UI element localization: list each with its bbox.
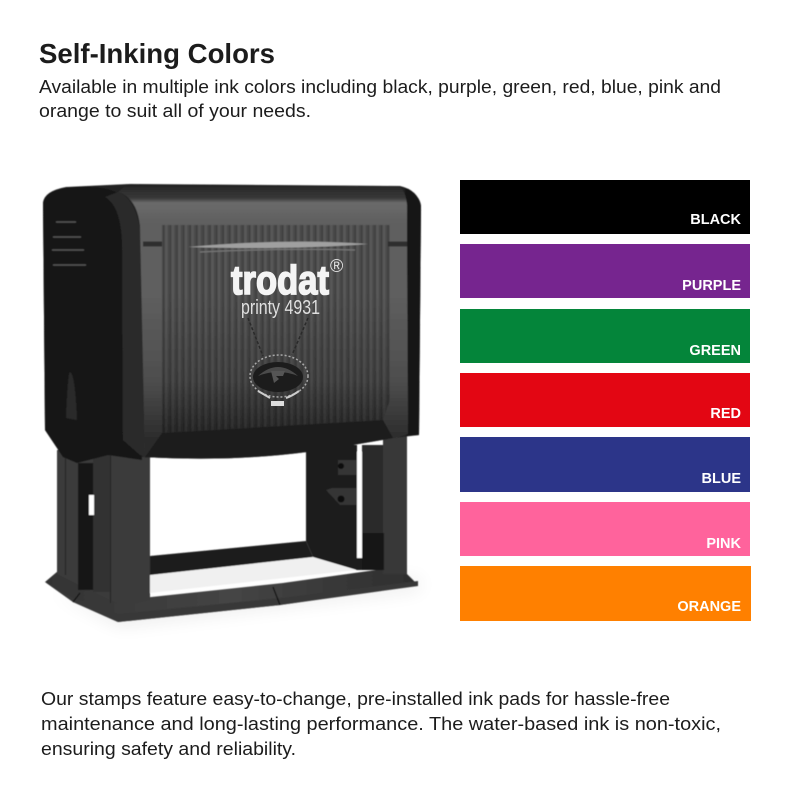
pointer lines to button xyxy=(248,318,308,356)
trodat logo: trodat xyxy=(231,257,329,303)
trodat logo: printy 4931 xyxy=(241,297,320,319)
trodat logo: ® xyxy=(330,256,343,276)
footer description text: Our stamps feature easy-to-change, pre-installed ink pads for hassle-free xyxy=(41,688,670,709)
swatch: red xyxy=(460,373,750,427)
left pillar xyxy=(57,450,150,606)
product photo: self-inking stamp xyxy=(43,184,421,626)
ribbed front panel xyxy=(162,225,390,433)
swatch: purple: PURPLE xyxy=(682,278,741,294)
swatch: orange: ORANGE xyxy=(677,599,741,615)
left side cap xyxy=(43,187,142,463)
swatch: pink: PINK xyxy=(706,536,742,552)
swatch: blue xyxy=(460,437,750,492)
swatch: green: GREEN xyxy=(689,343,741,359)
front panel side strips xyxy=(140,226,408,458)
title: Self-Inking Colors xyxy=(39,38,275,69)
footer description text: ensuring safety and reliability. xyxy=(41,738,296,759)
top band xyxy=(118,187,407,226)
intro text: Available in multiple ink colors including black, purple, green, red, blue, pink and xyxy=(39,76,721,97)
swatch: black xyxy=(460,180,750,234)
lower lip shadow xyxy=(145,420,393,459)
swatch: green xyxy=(460,309,750,363)
footer description text: maintenance and long-lasting performance. The water-based ink is non-toxic, xyxy=(41,713,721,734)
footer description text xyxy=(41,688,721,759)
stamp base xyxy=(45,557,418,622)
white floor inside the frame xyxy=(150,557,356,593)
swatch: red: RED xyxy=(710,406,741,422)
intro text xyxy=(39,76,721,121)
swatch: blue: BLUE xyxy=(702,471,741,487)
swatch: purple xyxy=(460,244,750,298)
intro text: orange to suit all of your needs. xyxy=(39,100,311,121)
swatch: black: BLACK xyxy=(690,212,742,228)
right edge xyxy=(405,188,421,436)
stamp cover body xyxy=(43,184,421,463)
oval release button xyxy=(250,355,308,406)
rear crossbar of frame xyxy=(150,541,313,575)
right pillar xyxy=(306,435,407,574)
swatch: orange xyxy=(460,566,751,621)
highlight grip line xyxy=(188,242,368,248)
swatch: pink xyxy=(460,502,750,556)
